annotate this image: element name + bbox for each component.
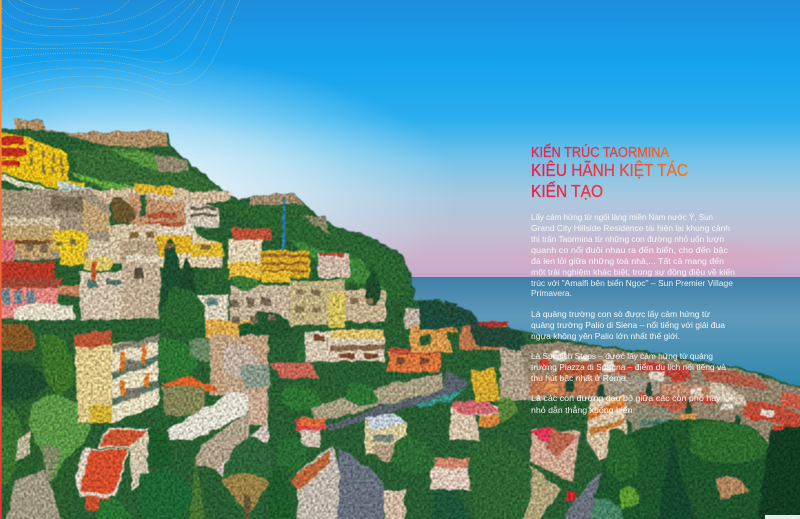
paragraph: intro: thị trấn Taormina từ những con đường nhỏ uốn lượn <box>531 234 724 244</box>
terracotta roofs <box>97 428 150 448</box>
paragraph: Palio <box>531 309 725 341</box>
paragraph: walking paths: Là các con đường dạo bộ giữa các con phố hay lối <box>531 393 732 403</box>
yellow building with balconies <box>75 338 158 423</box>
castle ruins <box>15 119 168 150</box>
paragraph: intro: quanh co nối đuôi nhau ra đến biển, cho đến bậc <box>531 245 729 255</box>
paragraph: Spanish Steps: thu hút bậc nhất ở Rome. <box>531 373 628 383</box>
hillside with town <box>0 119 800 519</box>
corner label <box>765 515 800 519</box>
foreground trees right <box>590 419 800 519</box>
secondary road and car <box>560 465 612 519</box>
agave tree <box>29 396 89 482</box>
mid-town beige buildings <box>0 190 110 260</box>
yellow curved building <box>52 230 88 265</box>
decorative contour wave lines <box>2 0 240 104</box>
foliage centre <box>295 341 336 364</box>
left edge accent strip <box>0 0 2 519</box>
pink and red buildings <box>0 236 55 252</box>
cypress centre <box>366 268 381 306</box>
paragraph: Spanish Steps: trường Piazza di Spagna – điểm du lịch nổi tiếng và <box>531 362 726 372</box>
small rooftops detail <box>130 232 792 430</box>
paragraph: Spanish Steps: Là Spanish Steps – được lấy cảm hứng từ quảng <box>531 351 713 361</box>
right town <box>520 342 800 445</box>
text block <box>531 144 735 415</box>
buildings centre <box>198 295 228 320</box>
shoreline cypress trees <box>420 300 480 330</box>
heading: KIẾN TRÚC TAORMINA <box>531 144 669 161</box>
paragraph: intro: Lấy cảm hứng từ ngôi làng miền Nam nước Ý, Sun <box>531 212 713 222</box>
heading: KIÊU HÃNH KIỆT TÁC <box>531 159 688 180</box>
foreground left greenery <box>0 320 80 519</box>
hill silhouette <box>0 119 800 519</box>
houses along the road <box>365 413 408 455</box>
orange and red mid buildings <box>305 332 385 362</box>
blue crane <box>282 198 285 250</box>
yellow hotel <box>0 130 85 195</box>
orange canopy <box>160 376 217 394</box>
paragraph: intro: một trải nghiệm khác biệt, trong sự đồng điệu về kiến <box>531 267 735 277</box>
foreground trees centre <box>468 439 531 519</box>
palm tree <box>222 438 273 519</box>
paragraph: intro: trúc với "Amalfi bên biển Ngọc" – Sun Premier Village <box>531 278 733 288</box>
heading: KIẾN TẠO <box>531 180 603 201</box>
pink-roofed house right <box>530 428 580 482</box>
paragraph: intro: Grand City Hillside Residence tái hiện lại khung cảnh <box>531 223 730 233</box>
paragraph: walking paths: nhỏ dẫn thẳng xuống biển. <box>531 404 635 415</box>
paragraph: Spanish Steps <box>531 351 726 383</box>
paragraph: walking paths <box>531 393 732 415</box>
heading <box>531 144 688 201</box>
foliage near tent <box>148 429 173 467</box>
foliage beside building <box>158 339 198 382</box>
paragraph: intro: đá len lỏi giữa những toà nhà,... Tất cả mang đến <box>531 256 724 266</box>
paragraph: intro <box>531 212 735 298</box>
paragraph: Palio: Là quảng trường con sò được lấy cảm hứng từ <box>531 309 710 319</box>
cypress trees left <box>161 238 182 322</box>
roof cluster centre-left <box>210 335 268 395</box>
white tent restaurant <box>168 391 250 440</box>
sea <box>400 277 800 412</box>
paragraph: Palio: quảng trường Palio di Siena – nổi tiếng với giải đua <box>531 320 725 330</box>
paragraph: Palio: ngựa không yên Palio lớn nhất thế giới. <box>531 331 680 341</box>
stone retaining wall and road <box>310 373 443 423</box>
green slope patches <box>70 146 235 205</box>
sky background <box>0 0 800 325</box>
paragraph: intro: Primavera. <box>531 288 572 298</box>
